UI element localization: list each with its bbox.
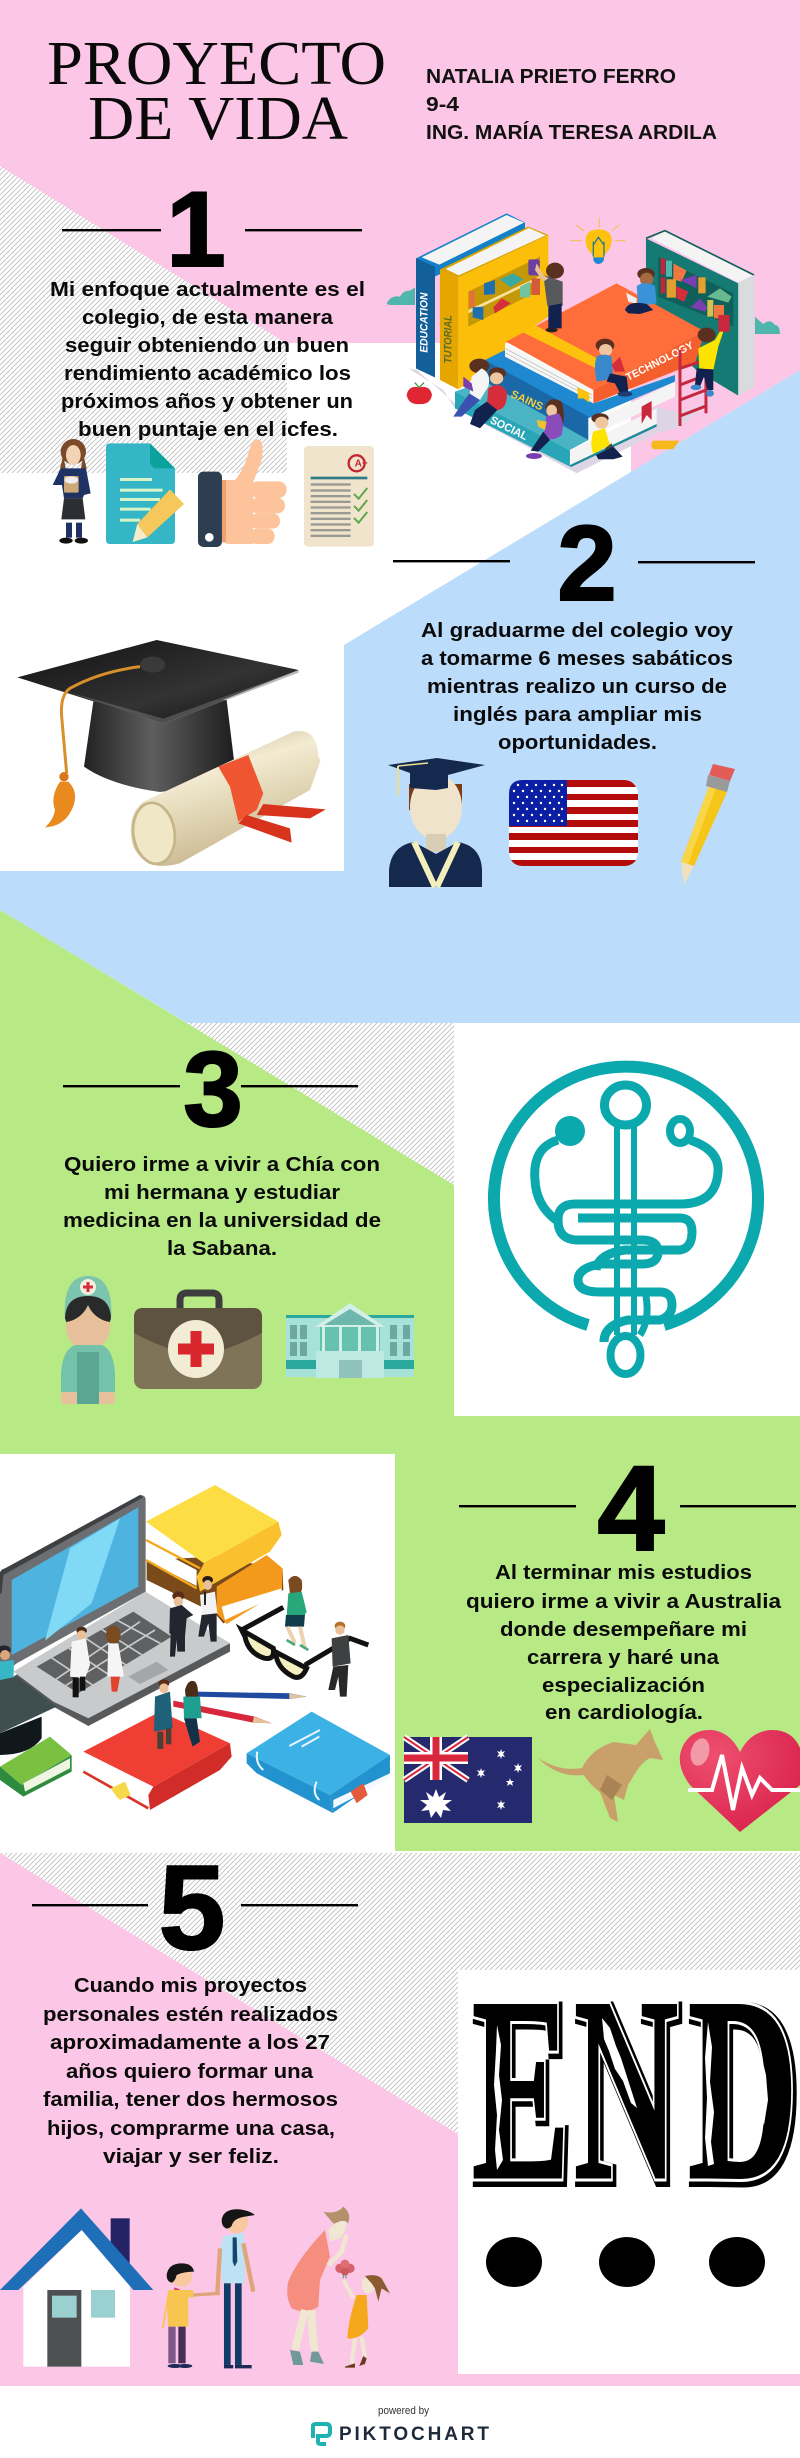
red book <box>83 1712 232 1810</box>
section 4 heading number: 4 <box>597 1440 665 1576</box>
reader sitting on top book <box>625 268 657 314</box>
section 5 text: personales estén realizados <box>43 2004 338 2026</box>
section 2 text: Al graduarme del colegio voy <box>421 620 734 642</box>
icon: caduceus medical symbol <box>494 1067 758 1374</box>
section 1 text: buen puntaje en el icfes. <box>78 419 338 441</box>
shadows on ground <box>408 368 713 473</box>
book: social: SOCIAL <box>488 415 529 443</box>
section 4 text: quiero irme a vivir a Australia <box>466 1591 782 1613</box>
section 2 text <box>421 620 734 754</box>
book: technology orange: TECHNOLOGY <box>624 339 696 384</box>
author details <box>426 66 717 144</box>
section 4 text: donde desempeñare mi <box>500 1619 747 1641</box>
book: technology orange <box>505 283 705 403</box>
section 2 text: oportunidades. <box>498 732 657 754</box>
laptop <box>0 1495 230 1726</box>
icon: kangaroo <box>538 1729 663 1822</box>
icon: light bulb <box>571 217 625 264</box>
illustration: isometric books and readers <box>387 213 780 473</box>
section 5 text: años quiero formar una <box>66 2061 314 2083</box>
icon: graduate <box>388 758 485 887</box>
cap board <box>17 640 299 723</box>
pink panel: header and section 1 <box>0 0 800 472</box>
yellow bookmark detail <box>651 441 679 449</box>
section 2 text: a tomarme 6 meses sabáticos <box>421 648 733 670</box>
yellow and orange books <box>146 1485 283 1624</box>
book: tutorial with shelves <box>440 227 548 389</box>
section 3 text <box>63 1154 381 1260</box>
reader standing at shelf <box>528 259 564 332</box>
book: tutorial with shelves: TUTORIAL <box>443 315 455 363</box>
letter N: N <box>576 1947 680 2237</box>
section 1 text: seguir obteniendo un buen <box>65 335 349 357</box>
letter D: D <box>688 1945 798 2234</box>
section 4 text: en cardiología. <box>545 1702 703 1724</box>
section 3 text: la Sabana. <box>167 1238 277 1260</box>
icon: graded checklist <box>304 446 374 547</box>
icon: pencil <box>681 764 735 885</box>
section 2 text: mientras realizo un curso de <box>427 676 727 698</box>
section 1 text: Mi enfoque actualmente es el <box>50 279 365 301</box>
boy <box>162 2263 220 2368</box>
section 2 text: inglés para ampliar mis <box>453 704 702 726</box>
green book <box>0 1737 72 1797</box>
icon: thumbs up <box>198 439 287 547</box>
section 1 text: colegio, de esta manera <box>82 307 334 329</box>
three dots <box>486 2237 765 2287</box>
icon: university building <box>286 1303 414 1378</box>
section 5 text: hijos, comprarme una casa, <box>47 2118 335 2140</box>
speckled wear on letters <box>494 2018 768 2170</box>
two people on red book <box>154 1679 202 1749</box>
two readers on the left <box>453 359 507 428</box>
section 5 text: viajar y ser feliz. <box>103 2146 279 2168</box>
reader sitting on book edge <box>595 339 632 397</box>
letter E: E <box>472 1944 570 2234</box>
section 4 text: Al terminar mis estudios <box>495 1562 752 1584</box>
reader climbing ladder <box>691 315 730 397</box>
icon: graded checklist: A+ <box>355 459 368 470</box>
green panel: section 3 and 4 <box>0 910 800 1851</box>
cap body <box>84 700 236 792</box>
title: DE VIDA <box>88 85 348 153</box>
section 1 heading number: 1 <box>166 169 226 289</box>
section 4 text: especialización <box>542 1675 705 1697</box>
section 4 text: carrera y haré una <box>527 1647 720 1669</box>
illustration: house and family <box>0 2207 390 2368</box>
section 1 text: rendimiento académico los <box>64 363 351 385</box>
icon: australian flag <box>404 1737 532 1823</box>
section 5 heading number: 5 <box>159 1841 225 1975</box>
section 5 text: Cuando mis proyectos <box>74 1975 307 1997</box>
glasses <box>242 1607 368 1677</box>
section 5 text: aproximadamente a los 27 <box>50 2032 330 2054</box>
illustration: graduation cap and diploma <box>17 640 326 867</box>
letter D: D <box>690 1948 800 2237</box>
man in suit <box>328 1622 351 1697</box>
book: education: EDUCATION <box>419 292 431 353</box>
section 5 text <box>43 1975 338 2168</box>
footer: powered by Piktochart: powered by <box>378 2405 429 2417</box>
cap button and tassel <box>45 657 165 827</box>
author details: 9-4 <box>426 94 460 116</box>
logo mark <box>313 2424 330 2444</box>
readers <box>453 259 730 459</box>
letter E: E <box>472 1944 570 2234</box>
graduation cap base <box>0 1677 57 1755</box>
blue book <box>247 1712 390 1813</box>
icon: document and pencil <box>106 443 184 544</box>
title <box>47 30 386 153</box>
icon row: student, document, thumb, checklist <box>53 439 374 547</box>
section 3 text: Quiero irme a vivir a Chía con <box>64 1154 380 1176</box>
daughter <box>343 2275 390 2368</box>
letter E: E <box>474 1947 572 2237</box>
father <box>217 2209 255 2367</box>
people on laptop <box>0 1576 217 1717</box>
hatched panel: section 3 <box>187 1023 454 1188</box>
section 3 text: medicina en la universidad de <box>63 1210 381 1232</box>
book: education <box>416 213 525 377</box>
END title graphic <box>472 1944 800 2237</box>
clouds <box>387 287 780 334</box>
flowers <box>335 2260 355 2278</box>
mother <box>287 2207 349 2365</box>
reader in yellow <box>591 413 623 459</box>
letter N: N <box>574 1944 678 2234</box>
section 5 text: familia, tener dos hermosos <box>43 2089 338 2111</box>
icon: first aid kit <box>134 1293 262 1389</box>
woman in green <box>285 1576 308 1650</box>
ladder <box>680 350 706 426</box>
section 2 heading number: 2 <box>557 503 617 623</box>
section 3 text: mi hermana y estudiar <box>104 1182 340 1204</box>
diploma <box>129 731 326 867</box>
section 1 text <box>50 279 365 441</box>
wordmark: PIKTOCHART <box>339 2424 489 2445</box>
book: technology green cover with shelves <box>646 231 754 396</box>
blue panel: section 2 <box>0 370 800 1023</box>
author details: ING. MARÍA TERESA ARDILA <box>426 121 717 144</box>
pencils <box>173 1692 307 1723</box>
icon: apple <box>407 383 432 404</box>
illustration: laptop, books and people <box>0 1485 390 1813</box>
house <box>0 2208 153 2367</box>
section 4 text <box>466 1562 782 1724</box>
book: sains <box>485 350 675 440</box>
footer: powered by Piktochart <box>313 2405 489 2445</box>
icon: student <box>53 439 91 544</box>
book: social <box>455 380 657 467</box>
title: PROYECTO <box>47 30 386 98</box>
section 3 heading number: 3 <box>183 1029 243 1149</box>
hatched panel: section 1 <box>0 166 287 473</box>
hatched panel: section 5 <box>0 1853 800 2134</box>
pink panel: section 5 <box>0 1853 800 2386</box>
book: sains: SAINS <box>509 388 545 413</box>
reader in purple <box>526 399 564 459</box>
icon: usa flag <box>509 780 638 866</box>
letter D: D <box>688 1945 798 2234</box>
icon: nurse <box>61 1276 115 1404</box>
icon: heart rate <box>680 1730 800 1832</box>
section 1 text: próximos años y obtener un <box>61 391 353 413</box>
letter N: N <box>574 1944 678 2234</box>
author details: NATALIA PRIETO FERRO <box>426 66 676 88</box>
